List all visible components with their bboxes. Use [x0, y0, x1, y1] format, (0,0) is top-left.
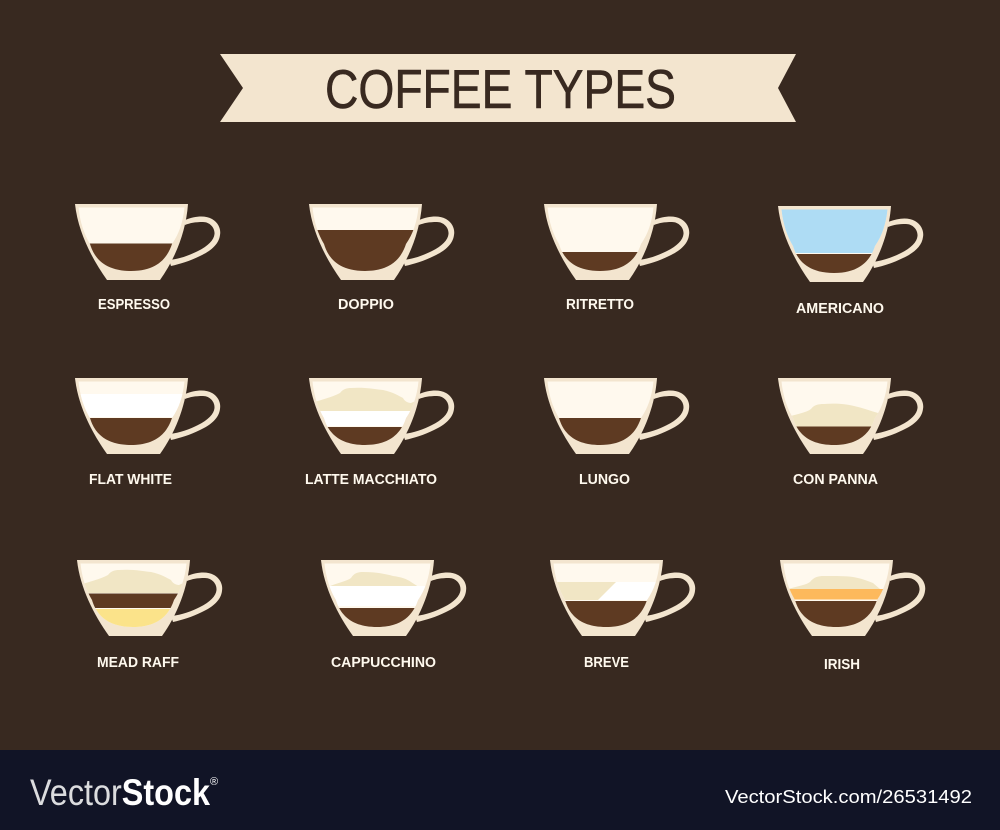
cup: mead raff — [77, 560, 222, 636]
footer url: VectorStock.com/26531492 — [725, 787, 972, 807]
label: con panna: CON PANNA — [793, 472, 879, 488]
cup: flat white — [75, 378, 220, 454]
cup: lungo — [544, 378, 689, 454]
label: irish: IRISH — [824, 657, 860, 673]
label: ritretto: RITRETTO — [566, 297, 634, 313]
cup: americano — [778, 206, 923, 282]
cup: latte macchiato — [309, 378, 454, 454]
cup: irish — [780, 560, 925, 636]
title: COFFEE TYPES — [325, 58, 676, 120]
label: doppio: DOPPIO — [338, 297, 394, 313]
label: espresso: ESPRESSO — [98, 297, 170, 313]
cup: doppio — [309, 204, 454, 280]
cup: con panna — [778, 378, 923, 454]
cup: breve — [550, 560, 695, 636]
registered mark: ® — [210, 776, 218, 788]
label: mead raff: MEAD RAFF — [97, 655, 179, 671]
cup: ritretto — [544, 204, 689, 280]
label: flat white: FLAT WHITE — [89, 472, 172, 488]
label: breve: BREVE — [584, 655, 629, 671]
label: lungo: LUNGO — [579, 472, 630, 488]
label: cappucchino: CAPPUCCHINO — [331, 655, 436, 671]
title banner — [220, 54, 796, 122]
footer bar — [0, 750, 1000, 830]
cup: cappucchino — [321, 560, 466, 636]
label: americano: AMERICANO — [796, 301, 884, 317]
label: latte macchiato: LATTE MACCHIATO — [305, 472, 437, 488]
footer logo: VectorStock — [30, 772, 210, 813]
cup: espresso — [75, 204, 220, 280]
